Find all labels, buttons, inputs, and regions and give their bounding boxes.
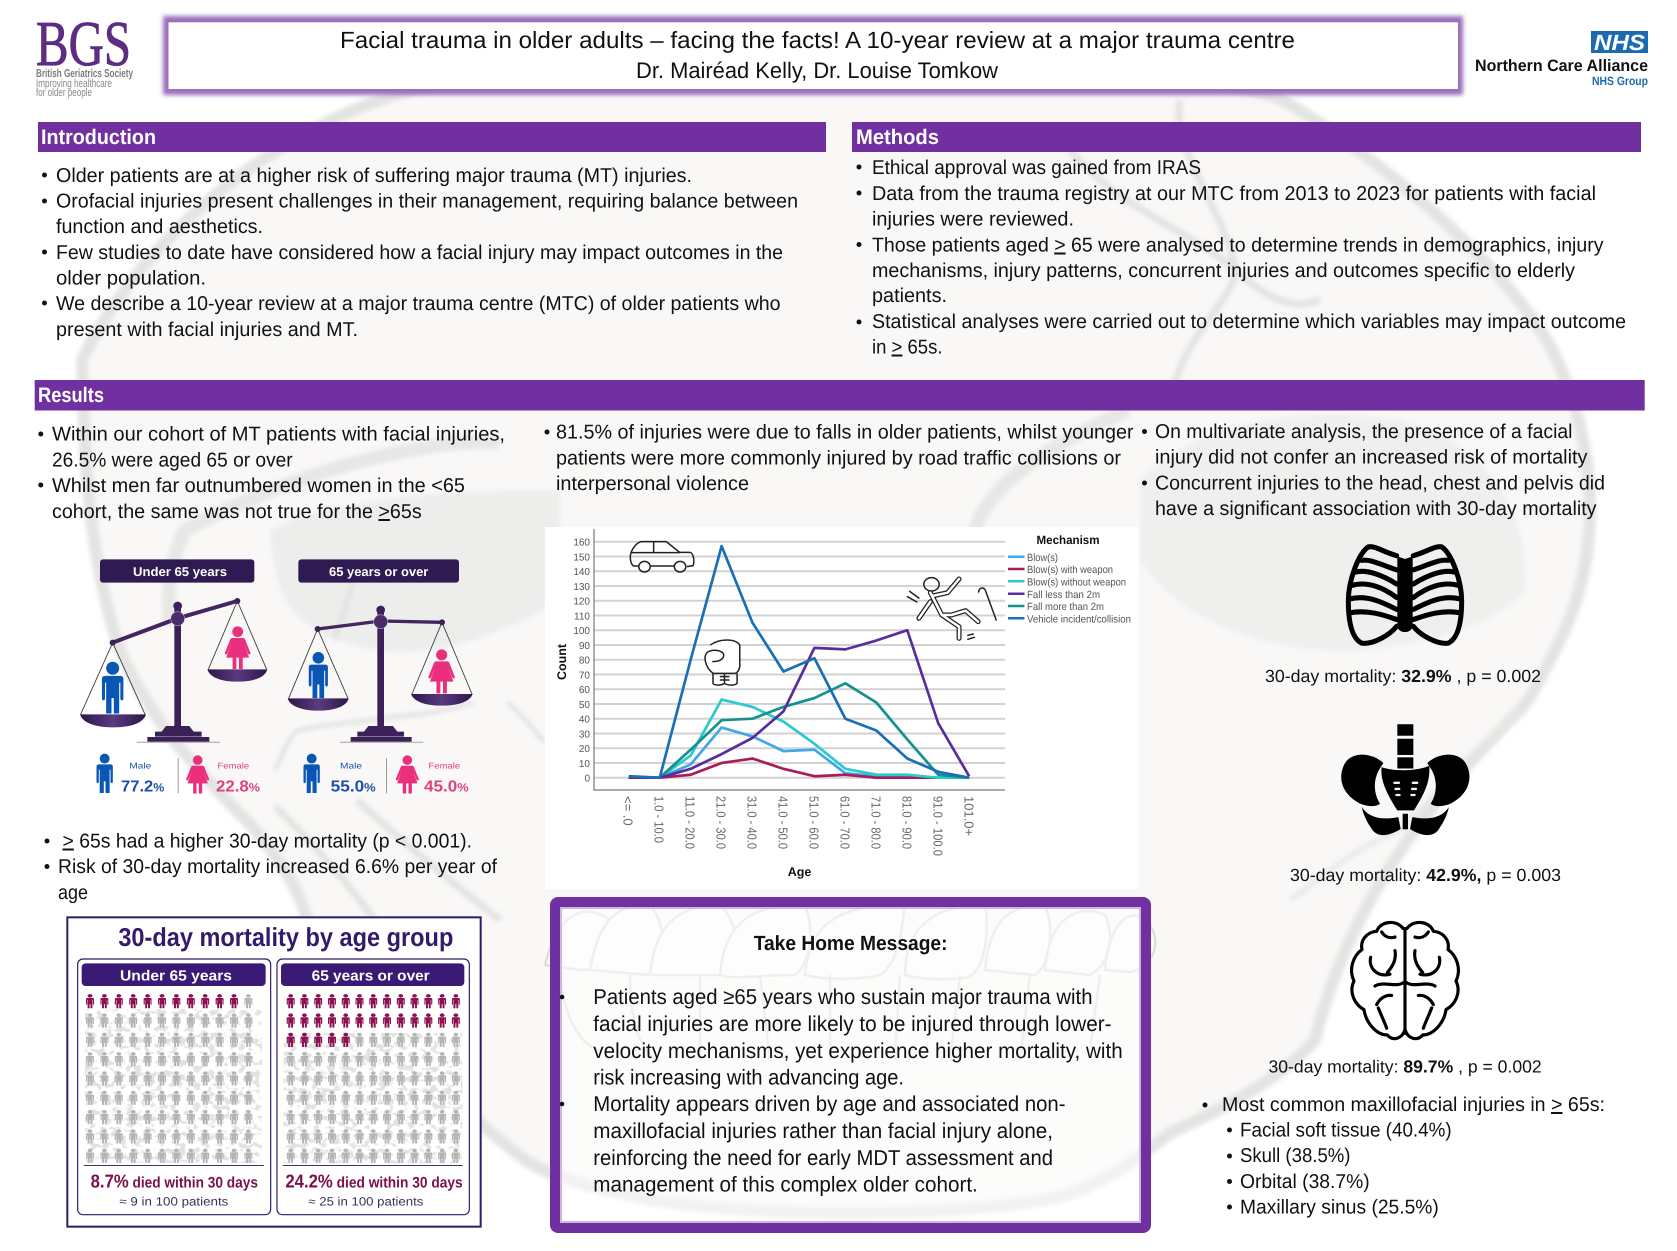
x axis labels: 81.0 - 90.0: [900, 796, 914, 849]
panel: 65 years or over: ≈ 25 in 100 patients: [308, 1195, 423, 1208]
x axis labels: 21.0 - 30.0: [714, 796, 728, 849]
logo: NHS Northern Care Alliance: NHS Group: [1592, 74, 1648, 88]
scale: 65 years or over: 65 years or over: [329, 565, 428, 579]
infographic title: 30-day mortality by age group: [118, 922, 453, 952]
introduction text: Few studies to date have considered how a facial injury may impact outcomes in the: [56, 242, 783, 264]
logo: NHS Northern Care Alliance: Northern Care Alliance: [1475, 57, 1648, 75]
methods text: Statistical analyses were carried out to determine which variables may impact outcome: [872, 311, 1626, 333]
y axis labels: 110: [574, 612, 590, 622]
results text: multivariate analysis: [1142, 421, 1605, 520]
icon: car: [630, 542, 694, 572]
list: common maxillofacial injuries: [1202, 1094, 1605, 1218]
legend: mechanism: Mechanism: [1036, 533, 1100, 547]
panel: introduction: [38, 122, 826, 341]
introduction text: Older patients are at a higher risk of suffering major trauma (MT) injuries.: [56, 165, 692, 187]
logo: British Geriatrics Society: Improving healthcare: [36, 78, 112, 90]
results text: multivariate analysis: injury did not confer an increased risk of mortality: [1155, 447, 1588, 469]
panel: take home message: [555, 902, 1146, 1228]
panel: under 65 years: [78, 959, 271, 1215]
authors: Dr. Mairéad Kelly, Dr. Louise Tomkow: [636, 58, 999, 83]
icon: pelvis: [1341, 724, 1469, 835]
legend: under 65 sex split: 22.8%: [216, 778, 260, 795]
x axis labels: [620, 796, 976, 856]
list: common maxillofacial injuries: Most common maxillofacial injuries in > 65s:: [1222, 1094, 1605, 1116]
y axis labels: 20: [579, 744, 590, 755]
icon: boxing glove: [705, 640, 740, 685]
y axis labels: 10: [579, 759, 590, 770]
infographic: sex balance scales: [80, 559, 473, 795]
y axis labels: 30: [579, 730, 590, 740]
x axis labels: 31.0 - 40.0: [744, 796, 760, 849]
methods text: mechanisms, injury patterns, concurrent injuries and outcomes specific to elderly: [872, 260, 1575, 282]
take home text: management of this complex older cohort.: [593, 1172, 978, 1196]
legend: mechanism: Fall less than 2m: [1027, 589, 1100, 601]
panel: under 65 years: 8.7% died within 30 days: [91, 1170, 258, 1191]
x axis labels: 1.0 - 10.0: [652, 796, 666, 843]
x axis title: Age: [788, 865, 811, 879]
x axis labels: 71.0 - 80.0: [868, 796, 884, 849]
legend: 65 or over sex split: Female: [428, 761, 460, 770]
results text: multivariate analysis: Concurrent injuries to the head, chest and pelvis did: [1155, 472, 1605, 494]
results text: mortality and age: age: [58, 882, 88, 904]
introduction text: function and aesthetics.: [56, 216, 263, 238]
x axis labels: 91.0 - 100.0: [930, 796, 946, 856]
panel: 65 years or over: 65 years or over: [312, 968, 430, 984]
results text: multivariate analysis: have a significant association with 30-day mortality: [1155, 498, 1596, 520]
methods text: Data from the trauma registry at our MTC from 2013 to 2023 for patients with facial: [872, 183, 1596, 205]
panel: 65 years or over: 24.2% died within 30 days: [285, 1170, 463, 1191]
list: common maxillofacial injuries: Orbital (38.7%): [1240, 1171, 1370, 1193]
methods text: patients.: [872, 285, 947, 307]
take home text: reinforcing the need for early MDT assessment and: [593, 1146, 1053, 1170]
take home text: Patients aged ≥65 years who sustain major trauma with: [593, 985, 1092, 1009]
infographic: 30-day mortality by age group: [67, 917, 481, 1227]
caption: pelvis mortality: 30-day mortality: 42.9%, p = 0.003: [1290, 865, 1561, 885]
take home text: facial injuries are more likely to be injured through lower-: [593, 1012, 1112, 1036]
logo: British Geriatrics Society: British Geriatrics Society: [36, 68, 133, 80]
results text: cohort demographics: cohort, the same was not true for the >65s: [52, 501, 422, 523]
methods text: Ethical approval was gained from IRAS: [872, 157, 1201, 179]
panel: under 65 years: ≈ 9 in 100 patients: [119, 1195, 228, 1208]
y axis labels: 70: [579, 670, 590, 682]
icon: falling person with walking stick: [907, 578, 996, 639]
take home heading: Take Home Message:: [754, 932, 948, 955]
x axis labels: 61.0 - 70.0: [838, 796, 852, 849]
x axis labels: <= .0: [620, 796, 636, 826]
line chart: injury mechanism by age: [545, 527, 1139, 889]
icon: brain: [1352, 922, 1458, 1039]
results text: mortality and age: > 65s had a higher 30-day mortality (p < 0.001).: [62, 830, 472, 852]
results text: cohort demographics: 26.5% were aged 65 or over: [52, 449, 293, 471]
panel: methods: [852, 122, 1641, 358]
legend: under 65 sex split: 77.2%: [121, 778, 164, 795]
take home text: maxillofacial injuries rather than facial injury alone,: [593, 1119, 1053, 1143]
panel: 65 years or over: [277, 959, 469, 1215]
methods text: [856, 157, 1626, 358]
legend: 65 or over sex split: 45.0%: [424, 778, 469, 795]
logo: NHS Northern Care Alliance: NHS: [1594, 30, 1645, 55]
results text: mechanisms: 81.5% of injuries were due to falls in older patients, whilst younger: [556, 422, 1134, 444]
data lines: [629, 546, 969, 778]
introduction text: We describe a 10-year review at a major trauma centre (MTC) of older patients who: [56, 293, 780, 315]
methods text: injuries were reviewed.: [872, 209, 1074, 231]
heading: results: [35, 380, 1645, 410]
heading: methods: [852, 122, 1641, 152]
take home text: Mortality appears driven by age and associated non-: [593, 1092, 1066, 1116]
legend: 65 or over sex split: [303, 754, 469, 795]
take home text: velocity mechanisms, yet experience higher mortality, with: [593, 1039, 1123, 1063]
logo: British Geriatrics Society: [36, 8, 133, 99]
icon: ribcage: [1348, 547, 1462, 643]
heading: results: Results: [38, 384, 104, 407]
legend: mechanism: Blow(s) with weapon: [1027, 564, 1113, 576]
results text: mechanisms: patients were more commonly injured by road traffic collisions or: [556, 447, 1121, 469]
results text: multivariate analysis: On multivariate analysis, the presence of a facial: [1155, 421, 1572, 443]
heading: introduction: [38, 122, 826, 152]
y axis labels: 150: [573, 552, 590, 564]
methods text: Those patients aged > 65 were analysed to determine trends in demographics, injury: [872, 234, 1604, 256]
scale: under 65 years: Under 65 years: [133, 565, 227, 579]
methods text: in > 65s.: [872, 336, 943, 358]
introduction text: present with facial injuries and MT.: [56, 319, 358, 341]
y axis title: Count: [555, 643, 569, 680]
y axis labels: 60: [579, 685, 590, 696]
introduction text: older population.: [56, 268, 206, 290]
logo: British Geriatrics Society: BGS: [36, 8, 131, 79]
legend: mechanism: [1008, 533, 1131, 626]
legend: 65 or over sex split: 55.0%: [331, 778, 376, 795]
list: common maxillofacial injuries: Facial soft tissue (40.4%): [1240, 1120, 1452, 1142]
y axis labels: 90: [579, 641, 590, 652]
list: common maxillofacial injuries: Skull (38.5%): [1240, 1145, 1350, 1167]
legend: mechanism: Fall more than 2m: [1027, 601, 1104, 613]
results text: cohort demographics: Whilst men far outnumbered women in the <65: [52, 475, 465, 497]
list: common maxillofacial injuries: Maxillary sinus (25.5%): [1240, 1196, 1439, 1218]
x axis labels: 41.0 - 50.0: [776, 796, 790, 849]
title box: [163, 16, 1463, 95]
caption: head mortality: 30-day mortality: 89.7% , p = 0.002: [1268, 1057, 1542, 1077]
heading: methods: Methods: [856, 126, 939, 149]
y axis labels: [573, 538, 590, 784]
y axis labels: 50: [579, 700, 590, 711]
heading: introduction: Introduction: [41, 126, 156, 149]
y axis labels: 140: [573, 567, 590, 578]
x axis labels: 101.0+: [962, 796, 976, 836]
introduction text: [42, 165, 798, 341]
legend: under 65 sex split: Male: [129, 761, 151, 770]
legend: mechanism: Blow(s): [1027, 552, 1058, 564]
caption: chest mortality: 30-day mortality: 32.9% , p = 0.002: [1265, 666, 1541, 686]
legend: mechanism: Blow(s) without weapon: [1027, 576, 1126, 588]
y axis labels: 40: [579, 714, 590, 726]
legend: under 65 sex split: [96, 754, 260, 795]
results text: mortality and age: [44, 830, 497, 904]
logo: British Geriatrics Society: for older people: [36, 87, 92, 99]
scale: 65 years or over: [288, 559, 473, 743]
results text: mechanisms: [544, 422, 1134, 495]
take home text: [560, 985, 1123, 1196]
scale: under 65 years: [80, 559, 267, 743]
x axis labels: 51.0 - 60.0: [806, 796, 822, 849]
results text: cohort demographics: [38, 424, 505, 523]
y axis labels: 130: [573, 582, 590, 593]
results text: cohort demographics: Within our cohort of MT patients with facial injuries,: [52, 424, 505, 446]
legend: mechanism: Vehicle incident/collision: [1027, 614, 1131, 626]
legend: 65 or over sex split: Male: [340, 761, 362, 770]
results text: mortality and age: Risk of 30-day mortality increased 6.6% per year of: [58, 856, 497, 878]
introduction text: Orofacial injuries present challenges in their management, requiring balance between: [56, 190, 798, 212]
y axis labels: 0: [584, 774, 590, 784]
x axis labels: 11.0 - 20.0: [682, 796, 698, 849]
y axis labels: 100: [573, 626, 590, 637]
y axis labels: 80: [579, 656, 590, 666]
logo: NHS Northern Care Alliance: [1475, 30, 1648, 88]
take home text: risk increasing with advancing age.: [593, 1066, 904, 1090]
y axis labels: 120: [573, 596, 590, 608]
y axis labels: 160: [573, 538, 590, 548]
panel: under 65 years: Under 65 years: [120, 968, 232, 984]
title text: Facial trauma in older adults – facing the facts! A 10-year review at a major trauma centre: [340, 27, 1295, 53]
results text: mechanisms: interpersonal violence: [556, 473, 749, 495]
legend: under 65 sex split: Female: [217, 761, 249, 770]
